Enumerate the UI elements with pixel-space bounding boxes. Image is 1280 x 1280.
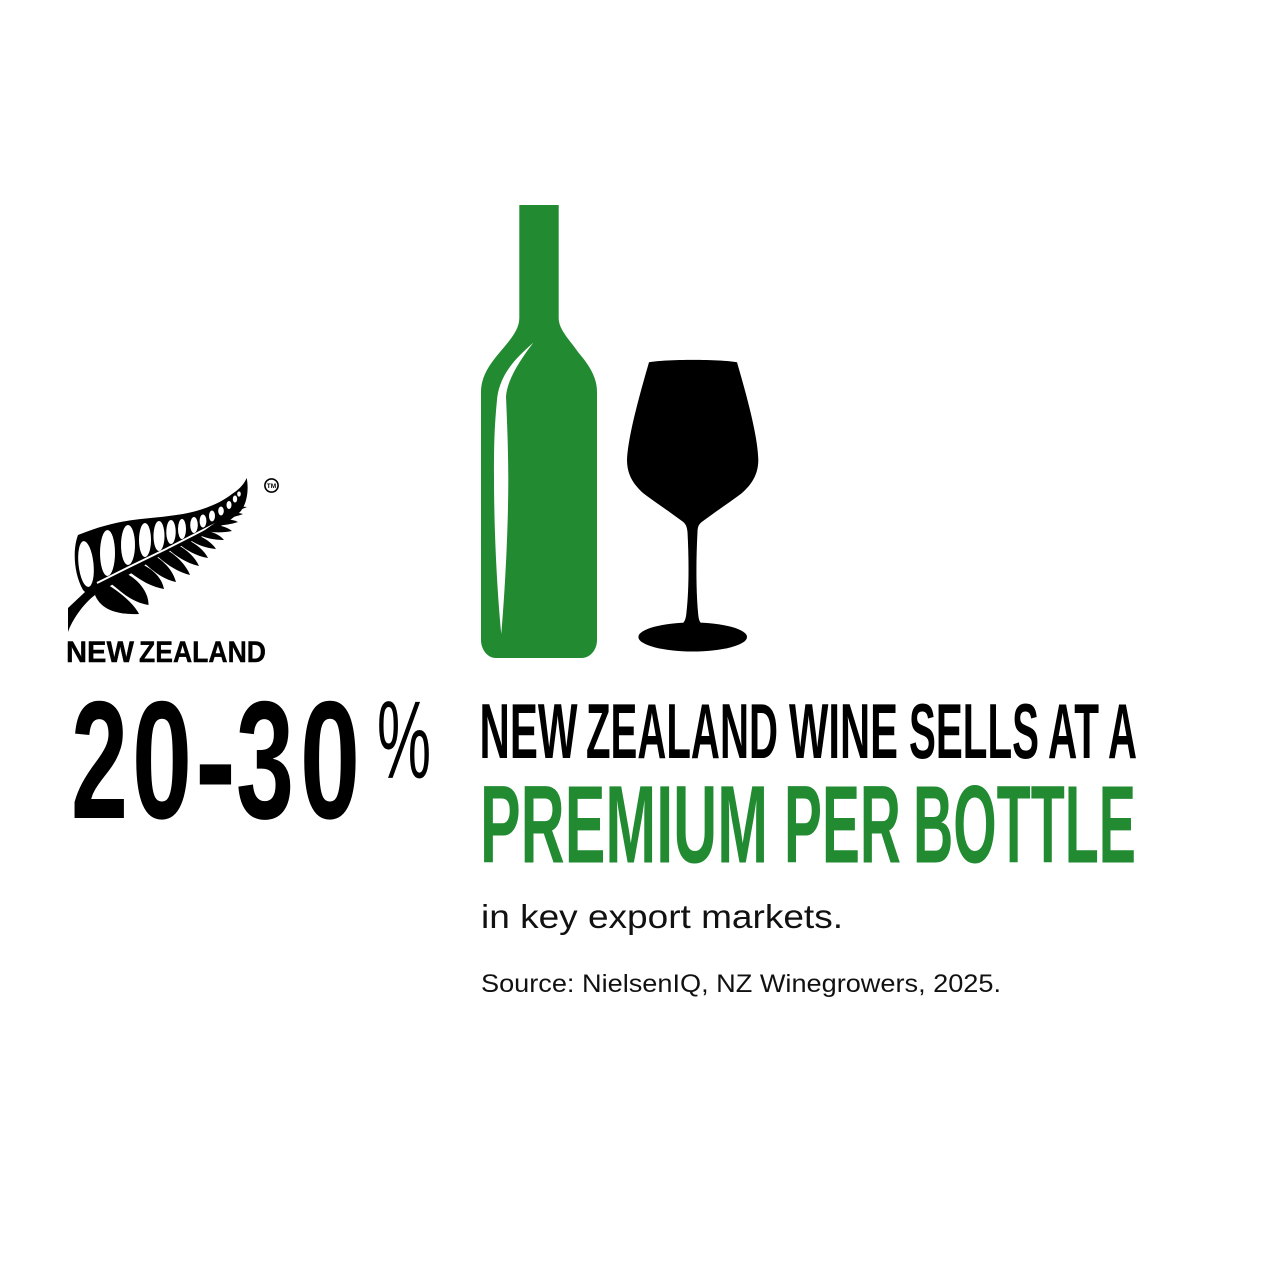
subheading text: in key export markets. [481, 898, 843, 935]
trademark symbol: TM [267, 483, 276, 490]
logo: New Zealand fern mark [66, 478, 278, 669]
big number: 20-30%: % [377, 679, 431, 802]
big number: 20-30% [71, 666, 431, 854]
dark lower pinnae [95, 507, 247, 614]
trademark symbol [265, 479, 278, 492]
logo wordmark: ZEALAND [139, 636, 266, 669]
headline line one: SELLS [909, 687, 1039, 775]
big number: 20-30%: 3 [236, 666, 294, 854]
big number: 20-30%: - [195, 666, 236, 854]
logo wordmark [66, 636, 266, 669]
headline line one: AT [1048, 687, 1099, 775]
headline line one: NEW [480, 687, 578, 775]
headline line two: PREMIUM [480, 764, 768, 886]
headline line one: ZEALAND [586, 687, 778, 775]
icon: wine glass [627, 360, 758, 652]
icon: silver fern [68, 478, 248, 632]
headline line one [480, 687, 1137, 775]
source note: Source: NielsenIQ, NZ Winegrowers, 2025. [481, 970, 1001, 998]
headline line one: WINE [789, 687, 898, 775]
icon: green wine bottle [481, 205, 597, 658]
headline line one: A [1108, 687, 1137, 775]
logo wordmark: NEW [66, 636, 135, 669]
big number: 20-30%: 0 [300, 666, 360, 854]
big number: 20-30%: 0 [132, 666, 192, 854]
big number: 20-30%: 2 [71, 666, 128, 854]
headline line two: PER [784, 764, 901, 886]
white oval pinnae [76, 491, 241, 588]
